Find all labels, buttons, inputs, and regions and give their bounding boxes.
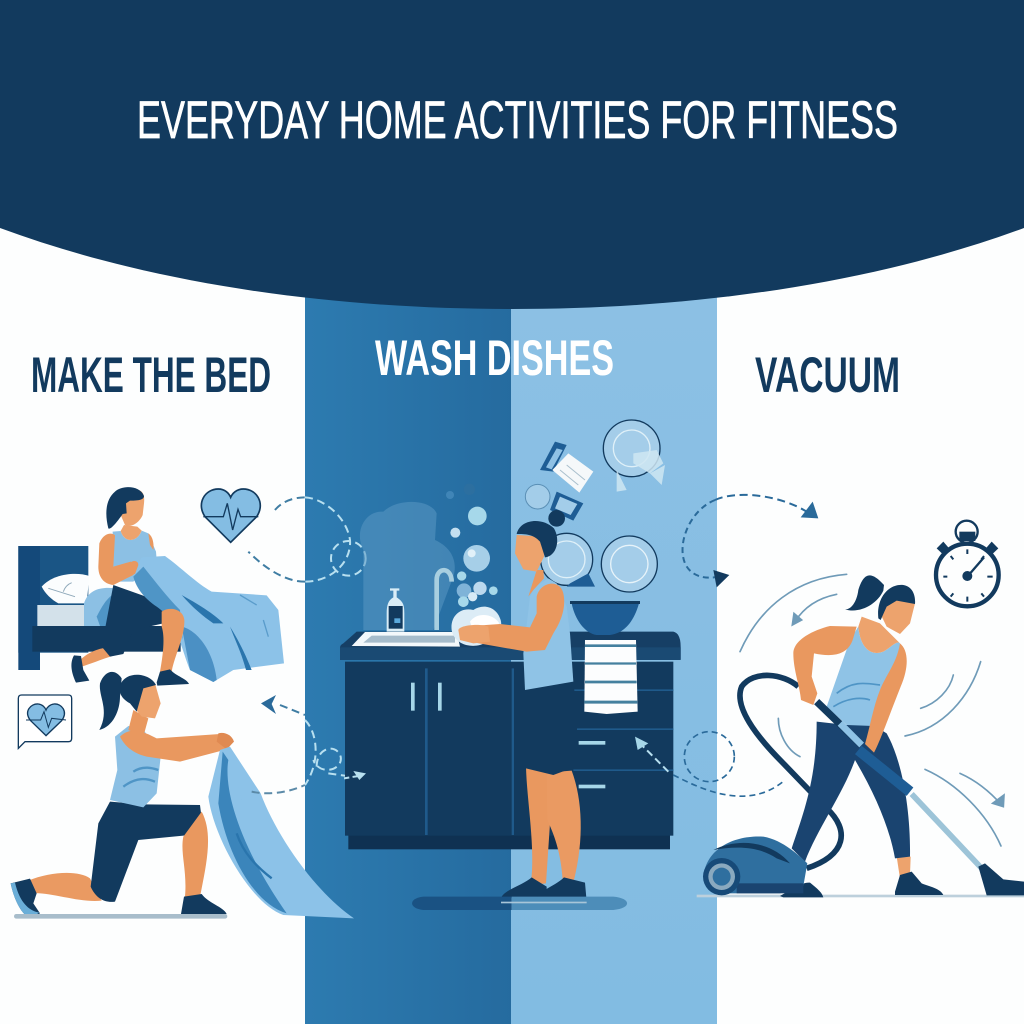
blanket on the bed: [133, 556, 284, 682]
header banner: [0, 0, 1024, 309]
arrow: small arrow into cabinet: [344, 771, 366, 780]
sink basin: [363, 636, 455, 643]
icon: heart rate message bubble: [18, 695, 72, 748]
dish towel: [584, 640, 638, 714]
panel: wash dishes illustration: [340, 420, 681, 910]
heading: vacuum: VACUUM: [755, 347, 900, 403]
vacuum hose: [740, 675, 841, 868]
arrow: upper dashed loop: [248, 497, 366, 582]
vacuuming person: [780, 575, 943, 897]
bed: [18, 546, 181, 670]
icon: heart with pulse: [201, 489, 260, 542]
steam silhouette: [360, 502, 455, 630]
panel: vacuum illustration: [673, 495, 1024, 897]
soap bubbles and foam: [446, 484, 501, 646]
panel: wash dishes background, dark half: [305, 290, 512, 1024]
person lunging with blanket: [11, 672, 234, 919]
cabinets and counter: [340, 632, 681, 849]
shadow under person: [412, 897, 627, 910]
panel: make the bed illustrations: [11, 487, 366, 919]
motion lines: [740, 574, 1004, 846]
heading: wash dishes: WASH DISHES: [375, 330, 614, 386]
person's front leg and hand over blanket: [128, 561, 189, 686]
soap bottle: [387, 588, 404, 632]
sink: [352, 632, 460, 647]
arrow: lower dashed loop: [252, 695, 363, 793]
heading: make the bed: MAKE THE BED: [31, 347, 271, 403]
panel: wash dishes background, light half: [511, 290, 717, 1024]
arrow: small arrow into drawer: [635, 737, 668, 772]
arrow: dashed loop bottom: [673, 732, 785, 796]
floating dishes: [525, 420, 665, 592]
bowl: [570, 601, 640, 635]
arrow: dashed loop top: [683, 495, 818, 587]
hanging blanket: [208, 747, 354, 918]
dishwashing person: [458, 510, 587, 902]
faucet: [437, 570, 452, 630]
stopwatch: [936, 521, 999, 606]
vacuum canister: [703, 837, 807, 895]
vacuum wand: [817, 702, 1024, 895]
floor line: [697, 895, 1024, 897]
person lunging at the bed: [71, 487, 182, 683]
